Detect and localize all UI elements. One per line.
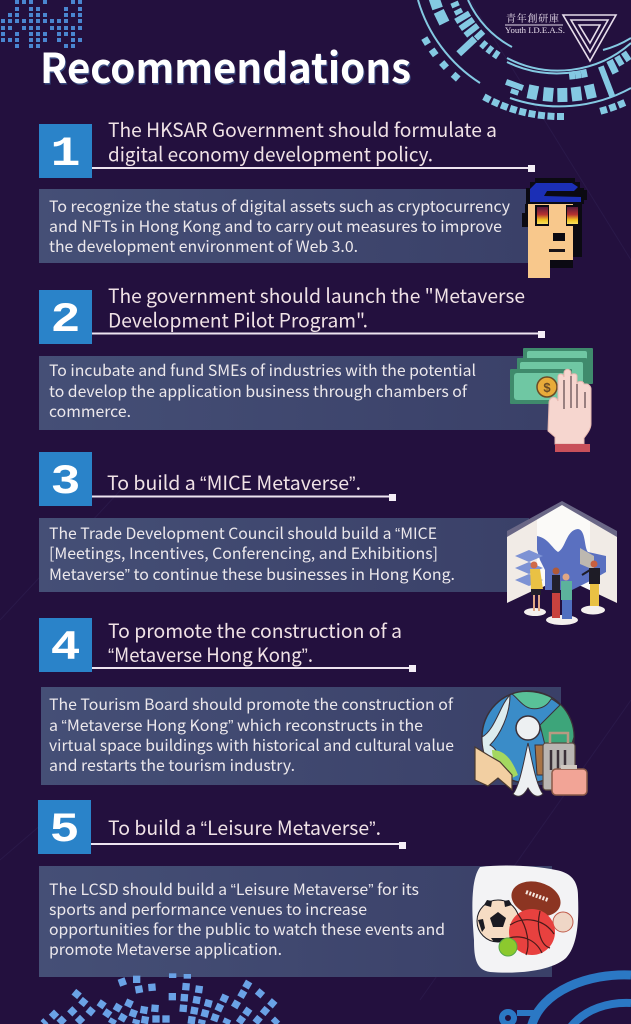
panel: recommendation 1 [39,114,587,278]
text box 2: to develop the application business through chambers of [49,380,468,402]
text box 5: sports and performance venues to increase [49,898,367,920]
heading 3: To build a “MICE Metaverse”. [107,467,361,496]
text box 4: a “Metaverse Hong Kong ” which reconstructs in the [49,714,423,736]
connector line 2 [92,331,545,338]
decoration: bottom-right blue circuit arcs [502,975,631,1024]
text box 1 [39,189,530,263]
text box 2: To incubate and fund SMEs of industries with the potential [49,359,476,381]
icon: sports balls on white card [472,866,578,973]
connector line 1 [92,165,535,172]
text box 3: [Meetings, Incentives, Conferencing, and Exhibitions] [49,542,438,564]
heading 2: The government should launch the "Metaverse [108,280,525,309]
icon: hand with money [510,348,593,452]
connector line 3 [92,494,396,501]
connector line 4 [92,665,416,672]
heading 4 [108,615,402,668]
text box 5: promote Metaverse application. [49,938,282,960]
heading 4: To promote the construction of a [108,615,402,644]
number badge 1: 1 [50,130,80,178]
panel: recommendation 2 [39,280,593,452]
number badge 2 [39,290,92,344]
heading 5: To build a “Leisure Metaverse”. [108,812,381,841]
number badge 2: 2 [50,296,80,344]
heading 1: digital economy development policy. [108,138,433,168]
logo: Youth I.D.E.A.S.: Youth I.D.E.A.S. [505,26,565,35]
heading 1: The HKSAR Government should formulate a [108,114,497,143]
text box 2 [39,356,549,430]
number badge 1 [39,124,92,178]
number badge 3 [39,452,92,506]
icon: exhibition booth with visitors [507,501,617,625]
text box 1: To recognize the status of digital assets such as cryptocurrency [49,195,510,217]
text box 5: opportunities for the public to watch these events and [49,918,445,940]
connector line 5 [91,842,406,849]
icon: globe, traveller and luggage [475,691,587,796]
heading 2: Development Pilot Program". [108,304,368,334]
heading 4: “Metaverse Hong Kong”. [108,639,313,668]
title: Recommendations [41,36,412,96]
number badge 4 [39,618,92,672]
icon: hand with money: $ [543,380,551,395]
number badge 5: 5 [50,806,80,854]
text box 5 [39,866,552,977]
text box 4: virtual space buildings with historical and cultural value [49,734,454,756]
text box 3: The Trade Development Council should build a “MICE [49,522,437,544]
text box 3: Metaverse” to continue these businesses in Hong Kong. [49,563,455,585]
text box 3 [39,518,529,592]
heading 1 [108,114,497,168]
decoration: top-left dot grid [1,0,82,48]
text box 4 [41,687,561,785]
panel: recommendation 3 [39,452,617,625]
text box 4: and restarts the tourism industry. [49,754,295,776]
panel: recommendation 5 [38,800,578,977]
ring r=157 [421,36,626,120]
ring r=133 [425,0,615,102]
text box 1: and NFTs in Hong Kong and to carry out measures to improve [49,215,502,237]
title: Recommendations [40,35,411,95]
heading 2 [108,280,525,334]
panel: recommendation 4 [39,615,587,796]
text box 5: The LCSD should build a “Leisure Metaverse” for its [49,878,419,900]
number badge 4: 4 [50,624,80,672]
logo: Youth I.D.E.A.S. [505,10,616,61]
number badge 5 [38,800,91,854]
text box 4: The Tourism Board should promote the construction of [49,693,454,715]
icon: pixel punk character [522,178,587,278]
decoration: top-right cyan arcs and blocks [418,0,631,120]
number badge 3: 3 [50,458,80,506]
logo: Youth I.D.E.A.S.: 青年創研庫 [506,10,559,25]
decoration: bottom dot burst [40,973,280,1024]
text box 1: the development environment of Web 3.0. [49,235,358,257]
ring r=114 [450,1,501,59]
text box 2: commerce. [49,400,131,422]
